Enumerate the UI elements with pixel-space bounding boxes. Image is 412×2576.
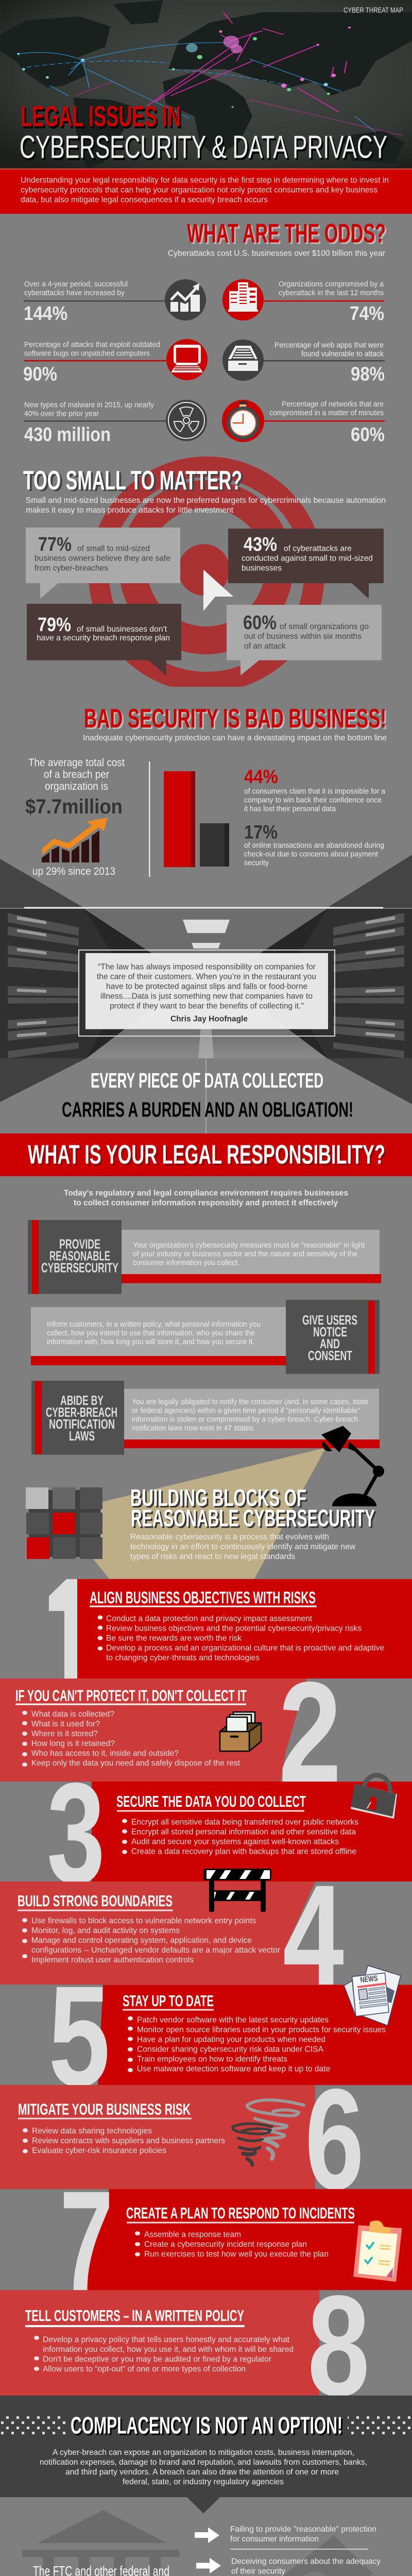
stat: 44 percent consumers: 44% bbox=[244, 766, 278, 787]
step 2 panel: if you can't protect it: How long is it retained? bbox=[31, 1739, 115, 1748]
icon: archive box bbox=[220, 1712, 261, 1751]
text block: breach cost: $7.7million bbox=[25, 795, 123, 818]
stat: 44 percent consumers bbox=[244, 766, 386, 813]
step 3 panel: secure the data: Create a data recovery plan with backups that are stored offline bbox=[131, 1848, 356, 1856]
stat: 90 percent: Percentage of attacks that exploit outdated bbox=[24, 340, 160, 349]
step 4 panel: build strong boundaries bbox=[0, 1855, 345, 2015]
panel: complacency is not an option: A cyber-breach can expose an organization to mitigation costs, business interruption, bbox=[53, 2448, 354, 2457]
panel: intro band: data, but also mitigate legal consequences if a security breach occurs bbox=[21, 196, 268, 205]
stat: 17 percent transactions: of online transactions are abandoned during bbox=[244, 841, 384, 850]
text block: regulatory intro: to collect consumer information responsibly and protect it effectively bbox=[74, 1199, 338, 1208]
step 4 panel: build strong boundaries: Use firewalls to block access to vulnerable network entry points bbox=[31, 1917, 256, 1925]
card: give users notice and consent: CONSENT bbox=[308, 1348, 352, 1363]
stat: 90 percent bbox=[23, 340, 167, 385]
step 1 panel: align business objectives: to changing cyber-threats and technologies bbox=[106, 1654, 260, 1663]
stat: 44 percent consumers: of consumers claim that it is impossible for a bbox=[244, 787, 386, 795]
panel: what is your legal responsibility bbox=[0, 1133, 412, 1176]
step 1 panel: align business objectives: Develop a process and an organizational culture that is proactive and adaptive bbox=[106, 1644, 384, 1653]
step 5 panel: stay up to date: Have a plan for updating your products when needed bbox=[137, 2036, 325, 2044]
panel: complacency is not an option: federal, state, or industry regulatory agencies bbox=[123, 2478, 284, 2486]
text: deceiving consumers: Deceiving consumers about the adequacy bbox=[231, 2557, 381, 2566]
step 3 panel: secure the data bbox=[47, 1753, 412, 1913]
step 7 panel: create a plan: 7 bbox=[60, 2161, 113, 2321]
callout: 77 percent: from cyber-breaches bbox=[35, 564, 108, 573]
icon: rising cost arrow and bars bbox=[42, 818, 108, 862]
callout: 43 percent: of cyberattacks are bbox=[284, 545, 352, 553]
stat: 60 percent: 60% bbox=[351, 424, 385, 446]
card: cyber-breach notification laws: notification laws now exist in 47 states. bbox=[132, 1424, 255, 1432]
panel: intro band bbox=[0, 168, 412, 214]
step 3 panel: secure the data: 3 bbox=[47, 1753, 105, 1913]
heading: building blocks of reasonable cybersecurity: technology in an effort to continuously identify and mitigate new bbox=[130, 1543, 355, 1551]
step 2 panel: if you can't protect it: Keep only the data you need and safely dispose of the rest bbox=[31, 1759, 241, 1768]
step 2 panel: if you can't protect it: IF YOU CAN'T PROTECT IT, DON'T COLLECT IT bbox=[15, 1687, 247, 1705]
panel: intro band: Understanding your legal responsibility for data security is the first step in determining where to invest in bbox=[21, 176, 389, 185]
light cone bbox=[93, 1448, 326, 1579]
step 5 panel: stay up to date: 5 bbox=[48, 1956, 110, 2116]
icon: stopwatch bbox=[222, 400, 264, 442]
callout: 60 percent: of an attack bbox=[244, 642, 286, 651]
stat: 144 percent: Over a 4-year period, successful bbox=[24, 280, 128, 289]
callout: 79 percent: 79% bbox=[38, 614, 71, 636]
heading: too small to matter bbox=[23, 466, 386, 515]
icon: padlock bbox=[351, 1775, 397, 1819]
perspective backdrop: lower walls bbox=[0, 1058, 412, 1133]
stat: 17 percent transactions: security bbox=[244, 859, 269, 868]
icon: newspaper bbox=[344, 1965, 401, 2026]
icon: file drawer bbox=[222, 340, 264, 381]
card: give users notice and consent: collect, how you intend to use that information, who you share the bbox=[47, 1329, 255, 1337]
text: deceiving consumers: of their security bbox=[231, 2567, 285, 2576]
step 3 panel: secure the data: Encrypt all sensitive data being transferred over public networks bbox=[131, 1818, 358, 1827]
heading: building blocks of reasonable cybersecurity bbox=[130, 1484, 375, 1561]
step 8 panel: tell customers: Develop a privacy policy that tells users honestly and accurately what bbox=[43, 2335, 290, 2344]
stat: 430 million: New types of malware in 2015, up nearly bbox=[24, 400, 154, 409]
card: give users notice and consent: information with, how long you will store it, and how you secure it. bbox=[47, 1337, 254, 1346]
heading: what are the odds bbox=[168, 218, 386, 258]
icon: clipboard checklist bbox=[353, 2221, 402, 2282]
target rings backdrop bbox=[99, 467, 314, 682]
heading: too small to matter: makes it easy to mass produce attacks for little investment bbox=[26, 506, 234, 515]
step 7 panel: create a plan bbox=[60, 2161, 412, 2321]
icon: building blocks bbox=[26, 1487, 102, 1559]
icon: radiation symbol bbox=[166, 400, 207, 441]
stat: 98 percent: found vulnerable to attack bbox=[301, 350, 384, 359]
stat: 98 percent: Percentage of web apps that were bbox=[274, 341, 384, 350]
stat: 60 percent bbox=[264, 400, 385, 446]
stat: 74 percent bbox=[264, 280, 384, 325]
text block: regulatory intro: Today's regulatory and legal compliance environment requires businesses bbox=[64, 1189, 348, 1198]
stat: 430 million: 430 million bbox=[24, 424, 111, 446]
card: give users notice and consent: AND bbox=[320, 1336, 340, 1351]
title bbox=[20, 100, 387, 165]
step 8 panel: tell customers: 8 bbox=[307, 2265, 370, 2426]
icon: newspaper: NEWS bbox=[360, 1974, 378, 1985]
text: failing to provide protection bbox=[230, 2525, 376, 2549]
callout: 77 percent: business owners believe they are safe bbox=[35, 554, 170, 563]
step 3 panel: secure the data: SECURE THE DATA YOU DO COLLECT bbox=[116, 1792, 306, 1810]
card: provide reasonable cybersecurity: consumer information you collect. bbox=[133, 1258, 239, 1267]
card: provide reasonable cybersecurity: of your industry or business sector and the nature and sensitivity of the bbox=[133, 1250, 357, 1258]
card: provide reasonable cybersecurity: CYBERSECURITY bbox=[41, 1260, 118, 1275]
callout: 79 percent: of small businesses don't bbox=[77, 625, 167, 634]
step 2 panel: if you can't protect it bbox=[0, 1652, 341, 1812]
card: cyber-breach notification laws: CYBER-BREACH bbox=[46, 1404, 117, 1420]
heading: too small to matter: Small and mid-sized businesses are now the preferred targets for cybercriminals because automation bbox=[26, 496, 386, 505]
step 7 panel: create a plan: Run exercises to test how well you execute the plan bbox=[144, 2250, 329, 2259]
text: failing to provide protection: for consumer information bbox=[230, 2535, 319, 2544]
icon: money backdrop bbox=[263, 2535, 391, 2576]
step 2 panel: if you can't protect it: What is it used for? bbox=[31, 1720, 100, 1728]
card: give users notice and consent: NOTICE bbox=[313, 1324, 347, 1340]
step 6 panel: mitigate your business risk: Review contracts with suppliers and business partners bbox=[32, 2137, 225, 2145]
panel: complacency is not an option: notification expenses, damage to brand and reputation, and lawsuits from customers, banks, bbox=[40, 2458, 367, 2467]
panel: Hoofnagle quote: have to be protected against slips and falls or food-borne bbox=[106, 982, 307, 991]
text block: breach cost: The average total cost bbox=[28, 757, 125, 769]
panel: Hoofnagle quote: the care of their customers. When you’re in the restaurant you bbox=[97, 973, 316, 981]
icon: courthouse backdrop bbox=[10, 2510, 192, 2576]
callout: 77 percent: of small to mid-sized bbox=[77, 545, 150, 553]
step 2 panel: if you can't protect it: Who has access to it, inside and outside? bbox=[31, 1749, 179, 1758]
step 5 panel: stay up to date: Consider sharing cybersecurity risk data under CISA bbox=[137, 2045, 323, 2054]
card: cyber-breach notification laws: or federal agencies) within a given time period if "personally identifiable" bbox=[132, 1406, 360, 1415]
stat: 90 percent: 90% bbox=[23, 364, 57, 385]
photo: server room corridor bbox=[0, 909, 412, 1058]
stat: 60 percent: compromised in a matter of minutes bbox=[269, 409, 384, 417]
callout: 60 percent: out of business within six months bbox=[244, 632, 362, 641]
text block: breach cost: of a breach per bbox=[44, 769, 109, 781]
text: deceiving consumers bbox=[229, 2557, 381, 2576]
panel: complacency is not an option bbox=[0, 2396, 412, 2513]
panel: Hoofnagle quote: protect if they want to bear the benefits of collecting it." bbox=[110, 1002, 304, 1011]
step 1 panel: align business objectives bbox=[49, 1579, 412, 1679]
step 1 panel: align business objectives: Be sure the rewards are worth the risk bbox=[106, 1634, 242, 1643]
icon: tornadoes bbox=[233, 2100, 304, 2165]
step 4 panel: build strong boundaries: Manage and control operating system, application, and device bbox=[31, 1936, 252, 1945]
stat: 44 percent consumers: it has lost their personal data bbox=[244, 805, 336, 813]
stat: 144 percent bbox=[24, 280, 165, 325]
stat: 430 million: 40% over the prior year bbox=[24, 409, 99, 418]
stat: 144 percent: cyberattacks have increased by bbox=[24, 289, 125, 297]
text block: breach cost: organization is bbox=[45, 781, 108, 792]
callout: 60 percent: 60% bbox=[243, 612, 277, 634]
heading: too small to matter: TOO SMALL TO MATTER? bbox=[23, 466, 242, 496]
step 2 panel: if you can't protect it: Where is it stored? bbox=[31, 1730, 98, 1738]
text block: breach cost bbox=[25, 757, 125, 877]
step 6 panel: mitigate your business risk: Review data sharing technologies bbox=[32, 2127, 152, 2136]
step 1 panel: align business objectives: Review business objectives and the potential cybersecurity/privacy risks bbox=[106, 1624, 362, 1633]
card: give users notice and consent: GIVE USERS bbox=[302, 1312, 357, 1328]
step 5 panel: stay up to date: Train employees on how to identify threats bbox=[137, 2055, 287, 2064]
step 2 panel: if you can't protect it: 2 bbox=[279, 1652, 341, 1812]
step 6 panel: mitigate your business risk: MITIGATE YOUR BUSINESS RISK bbox=[18, 2100, 191, 2119]
panel: Hoofnagle quote bbox=[79, 950, 335, 1036]
callout: 43 percent bbox=[228, 529, 384, 599]
stat: 17 percent transactions: 17% bbox=[244, 821, 278, 843]
perspective backdrop: upper walls bbox=[0, 855, 412, 908]
text block: regulatory intro bbox=[64, 1189, 348, 1208]
heading: building blocks of reasonable cybersecurity: BUILDING BLOCKS OF bbox=[130, 1484, 306, 1511]
icon: rising chart bbox=[165, 279, 206, 320]
heading: building blocks of reasonable cybersecurity: Reasonable cybersecurity is a process that evolves with bbox=[130, 1533, 329, 1541]
card: cyber-breach notification laws: LAWS bbox=[69, 1428, 95, 1444]
step 7 panel: create a plan: Create a cybersecurity incident response plan bbox=[144, 2240, 307, 2249]
callout: 43 percent: businesses bbox=[242, 564, 282, 573]
arrow: failing to provide protection bbox=[195, 2528, 219, 2543]
step 8 panel: tell customers: Allow users to “opt-out” of one or more types of collection bbox=[43, 2365, 246, 2374]
stat: 44 percent consumers: company to win back their confidence once bbox=[244, 795, 382, 805]
stat: 98 percent bbox=[264, 341, 385, 385]
step 8 panel: tell customers bbox=[0, 2265, 370, 2426]
callout: 79 percent bbox=[27, 604, 181, 675]
callout: 60 percent: of small organizations go bbox=[280, 622, 369, 631]
icon: office building bbox=[222, 279, 264, 320]
text block: breach cost: up 29% since 2013 bbox=[32, 866, 115, 877]
arrow: deceiving consumers bbox=[196, 2558, 221, 2573]
callout: 43 percent: 43% bbox=[244, 534, 277, 555]
step 5 panel: stay up to date: Use malware detection software and keep it up to date bbox=[137, 2065, 330, 2073]
step 5 panel: stay up to date: Patch vendor software with the latest security updates bbox=[137, 2016, 329, 2025]
card: cyber-breach notification laws: NOTIFICATION bbox=[49, 1416, 115, 1432]
panel: intro band: cybersecurity protocols that can help your organization not only protect consumers and key business bbox=[21, 186, 377, 195]
callout: 77 percent: 77% bbox=[38, 534, 72, 555]
card: provide reasonable cybersecurity: REASONABLE bbox=[49, 1248, 110, 1263]
map: continents and attack lines bbox=[0, 0, 412, 168]
heading: building blocks of reasonable cybersecurity: types of risks and react to new legal standards bbox=[130, 1552, 295, 1561]
step 6 panel: mitigate your business risk: 6 bbox=[305, 2059, 364, 2219]
callout: 60 percent bbox=[227, 605, 382, 675]
step 7 panel: create a plan: Assemble a response team bbox=[144, 2230, 241, 2239]
card: cyber-breach notification laws bbox=[31, 1381, 380, 1455]
heading: what are the odds: Cyberattacks cost U.S. businesses over $100 billion this year bbox=[168, 249, 386, 258]
step 2 panel: if you can't protect it: What data is collected? bbox=[31, 1710, 114, 1719]
step 4 panel: build strong boundaries: Implement robust user authentication controls bbox=[31, 1956, 194, 1964]
stat: 60 percent: Percentage of networks that are bbox=[282, 400, 384, 409]
card: provide reasonable cybersecurity: PROVIDE bbox=[59, 1236, 100, 1251]
card: give users notice and consent: Inform customers, in a written policy, what personal information you bbox=[47, 1320, 261, 1329]
step 4 panel: build strong boundaries: 4 bbox=[283, 1855, 345, 2015]
step 1 panel: align business objectives: Conduct a data protection and privacy impact assessment bbox=[106, 1615, 313, 1623]
card: cyber-breach notification laws: information is stolen or compromised by a cyber-breach. Cyber-breach bbox=[132, 1415, 358, 1424]
heading: bad security is bad business: Inadequate cybersecurity protection can have a devastating impact on the bottom line bbox=[83, 734, 387, 742]
step 3 panel: secure the data: Encrypt all stored personal information and other sensitive data bbox=[131, 1828, 356, 1837]
icon: desk lamp bbox=[321, 1426, 384, 1506]
stat: 17 percent transactions: check-out due to concerns about payment bbox=[244, 850, 379, 859]
list: FTC case triggers bbox=[195, 2525, 382, 2576]
icon: laptop bbox=[166, 339, 208, 380]
stat: 74 percent: cyberattack in the last 12 months bbox=[279, 289, 384, 297]
step 6 panel: mitigate your business risk bbox=[0, 2059, 364, 2219]
step 8 panel: tell customers: TELL CUSTOMERS – IN A WRITTEN POLICY bbox=[25, 2307, 244, 2325]
step 5 panel: stay up to date bbox=[48, 1956, 412, 2116]
stat: 144 percent: 144% bbox=[24, 303, 67, 325]
step 4 panel: build strong boundaries: configurations -- Unchanged vendor defaults are a major attack vector bbox=[31, 1946, 281, 1955]
step 5 panel: stay up to date: STAY UP TO DATE bbox=[123, 1992, 214, 2010]
step 6 panel: mitigate your business risk: Evaluate cyber-risk insurance policies bbox=[32, 2146, 166, 2155]
stat: 74 percent: 74% bbox=[350, 303, 384, 325]
stat: 90 percent: software bugs on unpatched computers bbox=[24, 349, 150, 358]
panel: Hoofnagle quote: “The law has always imposed responsibility on companies for bbox=[98, 963, 316, 972]
panel: hero cyber threat map bbox=[0, 0, 412, 168]
panel: Hoofnagle quote: Chris Jay Hoofnagle bbox=[170, 1015, 248, 1024]
stat: 74 percent: Organizations compromised by a bbox=[279, 280, 384, 289]
stat: 17 percent transactions bbox=[244, 821, 384, 868]
callout: 43 percent: conducted against small to mid-sized bbox=[242, 554, 373, 563]
callout: 79 percent: have a security breach response plan bbox=[37, 634, 170, 642]
step 5 panel: stay up to date: Monitor open source libraries used in your products for security issues bbox=[137, 2026, 386, 2035]
step 8 panel: tell customers: Don't be deceptive or you may be audited or fined by a regulator bbox=[43, 2355, 272, 2364]
step 3 panel: secure the data: Audit and secure your systems against well-known attacks bbox=[131, 1838, 339, 1846]
icon: road barrier bbox=[203, 1869, 271, 1912]
panel: complacency is not an option: and third party vendors. A breach can also draw the attention of one or more bbox=[65, 2468, 339, 2477]
icon: cursor arrow bbox=[203, 570, 233, 611]
panel: Hoofnagle quote: illness....Data is just something new that companies have to bbox=[100, 992, 313, 1001]
callout: 77 percent bbox=[26, 528, 180, 599]
card: cyber-breach notification laws: ABIDE BY bbox=[60, 1393, 104, 1408]
stat: 430 million bbox=[24, 400, 166, 446]
step 4 panel: build strong boundaries: BUILD STRONG BOUNDARIES bbox=[18, 1892, 173, 1910]
panel: statistics grid bbox=[23, 279, 385, 446]
title: LEGAL ISSUES IN bbox=[21, 100, 181, 133]
bar chart: 44 and 17 percent bbox=[164, 771, 229, 867]
step 4 panel: build strong boundaries: Monitor, log, and audit activity on systems bbox=[31, 1926, 180, 1935]
heading: every piece of data bbox=[62, 1069, 353, 1122]
step 8 panel: tell customers: information you collect, how you use it, and with whom it will be shared bbox=[43, 2345, 294, 2354]
card: give users notice and consent bbox=[31, 1300, 380, 1374]
card: provide reasonable cybersecurity bbox=[28, 1220, 381, 1294]
stat: 98 percent: 98% bbox=[351, 364, 385, 385]
text: failing to provide protection: Failing to provide "reasonable" protection bbox=[230, 2525, 376, 2534]
card: provide reasonable cybersecurity: Your organization's cybersecurity measures must be "reasonable" in light bbox=[133, 1241, 365, 1250]
card: cyber-breach notification laws: You are legally obligated to notify the consumer (and, in some cases, state bbox=[132, 1397, 368, 1406]
